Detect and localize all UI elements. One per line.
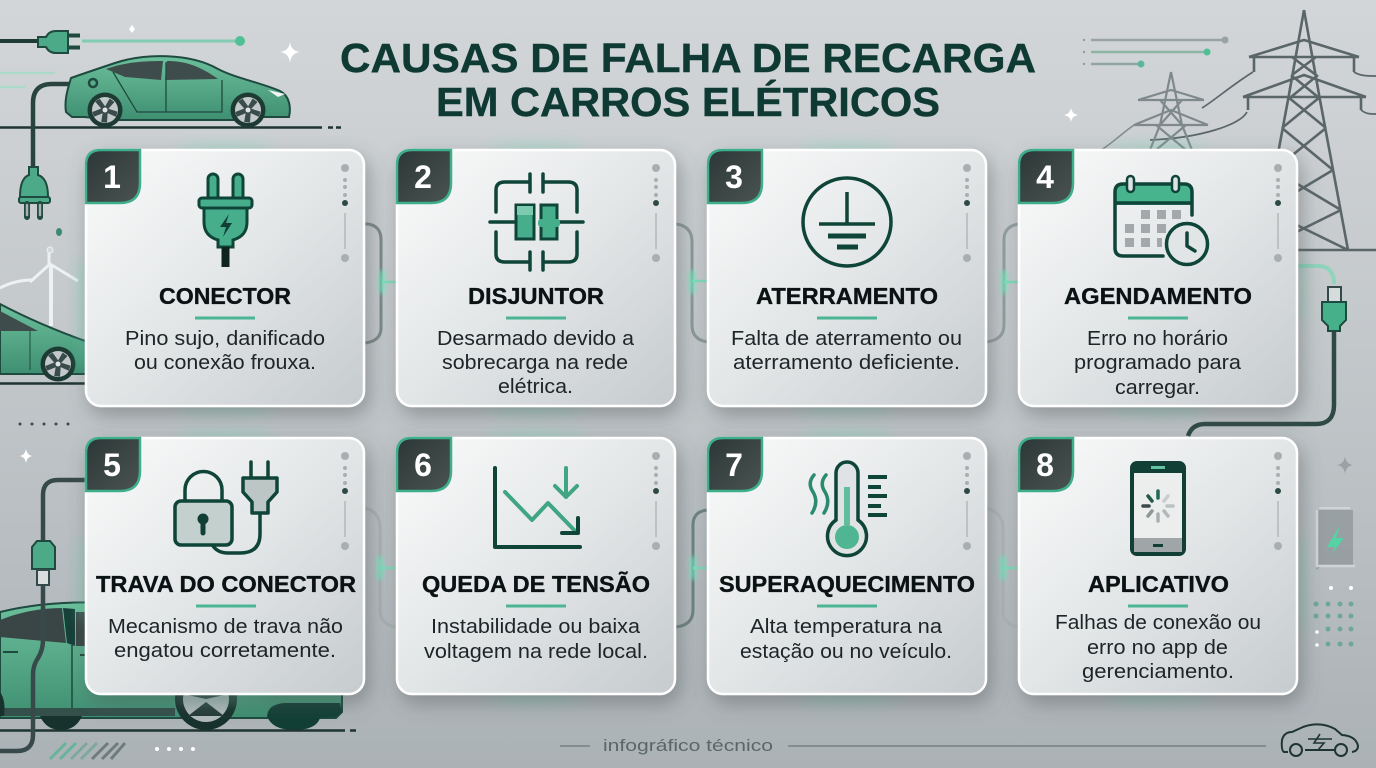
title: EM CARROS ELÉTRICOS	[436, 79, 940, 125]
icon: smartphone with spinner	[1130, 461, 1186, 556]
panel: 6 queda de tensao: Instabilidade ou baixa	[431, 616, 641, 638]
bottom left car	[0, 602, 356, 730]
panel: 8 aplicativo: erro no app de	[1087, 637, 1228, 659]
panel: 7 superaquecimento: 7	[725, 447, 743, 483]
panel: 3 aterramento: aterramento deficiente.	[733, 352, 960, 374]
battery and dot grid	[1314, 508, 1355, 647]
connectors between cards	[365, 224, 1019, 627]
title: CAUSAS DE FALHA DE RECARGA	[340, 35, 1036, 81]
panel: 7 superaquecimento	[708, 438, 986, 694]
panel: 2 disjuntor: elétrica.	[498, 376, 573, 398]
icon: ground symbol	[803, 178, 891, 266]
panel: 5 trava do conector: 5	[103, 447, 121, 483]
panel: 7 superaquecimento: estação ou no veículo.	[740, 641, 952, 663]
panel: 8 aplicativo: Falhas de conexão ou	[1055, 612, 1261, 634]
panel: 7 superaquecimento: SUPERAQUECIMENTO	[719, 571, 975, 597]
sparkles	[20, 25, 1353, 474]
panel: 4 agendamento: programado para	[1074, 352, 1242, 374]
top left plug and cable	[0, 31, 245, 87]
panel: 6 queda de tensao: 6	[414, 447, 432, 483]
panel: 2 disjuntor	[397, 150, 675, 406]
panel: 6 queda de tensao: QUEDA DE TENSÃO	[422, 570, 650, 597]
panel: 4 agendamento	[1019, 150, 1297, 406]
decoration: status lines top right	[1083, 36, 1228, 68]
panel: 1 conector: Pino sujo, danificado	[125, 328, 325, 350]
decoration: power transmission towers	[1098, 10, 1376, 250]
panel: 4 agendamento: carregar.	[1115, 377, 1200, 399]
green glows	[377, 270, 1007, 580]
panel: 1 conector: 1	[103, 159, 121, 195]
panel: 8 aplicativo: 8	[1036, 447, 1054, 483]
panel: 2 disjuntor: 2	[414, 159, 432, 195]
panel: 8 aplicativo: gerenciamento.	[1082, 661, 1234, 683]
row two cable and plug	[0, 480, 87, 751]
panel: 6 queda de tensao: voltagem na rede local.	[424, 641, 648, 663]
icon: plug	[199, 174, 252, 267]
panel: 5 trava do conector: TRAVA DO CONECTOR	[96, 571, 356, 597]
top car	[0, 56, 341, 167]
icon: thermometer	[810, 462, 887, 556]
panel: 3 aterramento: Falta de aterramento ou	[731, 328, 962, 350]
panel: 5 trava do conector: Mecanismo de trava não	[108, 616, 343, 638]
panel: 5 trava do conector	[86, 438, 364, 694]
panel: 7 superaquecimento: Alta temperatura na	[750, 616, 943, 638]
icon: outline car	[1282, 724, 1358, 756]
panel: 6 queda de tensao	[397, 438, 675, 694]
stripes and dots bottom left	[50, 743, 195, 759]
panel: 4 agendamento: AGENDAMENTO	[1064, 283, 1252, 309]
footer label: infográfico técnico	[603, 736, 773, 755]
panel: 1 conector	[86, 150, 364, 406]
left car	[0, 304, 90, 384]
panel: 5 trava do conector: engatou corretamente.	[114, 640, 336, 662]
panel: 3 aterramento: 3	[725, 159, 743, 195]
panel: 4 agendamento: 4	[1036, 159, 1054, 195]
panel: 2 disjuntor: DISJUNTOR	[468, 283, 604, 309]
panel: 1 conector: ou conexão frouxa.	[134, 352, 316, 374]
panel: 1 conector: CONECTOR	[159, 283, 291, 309]
panel: 3 aterramento	[708, 150, 986, 406]
icon: breaker	[490, 174, 583, 270]
title	[340, 35, 1036, 125]
icon: falling voltage chart	[495, 468, 580, 547]
panel: 4 agendamento: Erro no horário	[1087, 328, 1228, 350]
right cable with connector	[1188, 266, 1346, 436]
panel: 3 aterramento: ATERRAMENTO	[756, 283, 938, 309]
panel: 8 aplicativo: APLICATIVO	[1088, 571, 1229, 597]
icon: padlock and plug	[175, 462, 277, 553]
hanging plug	[19, 167, 62, 236]
small dots	[18, 422, 70, 426]
icon: calendar with clock	[1115, 176, 1208, 264]
panel: 2 disjuntor: Desarmado devido a	[437, 328, 635, 350]
panel: 8 aplicativo	[1019, 438, 1297, 694]
panel: 2 disjuntor: sobrecarga na rede	[442, 352, 628, 374]
wind turbine	[0, 247, 78, 326]
